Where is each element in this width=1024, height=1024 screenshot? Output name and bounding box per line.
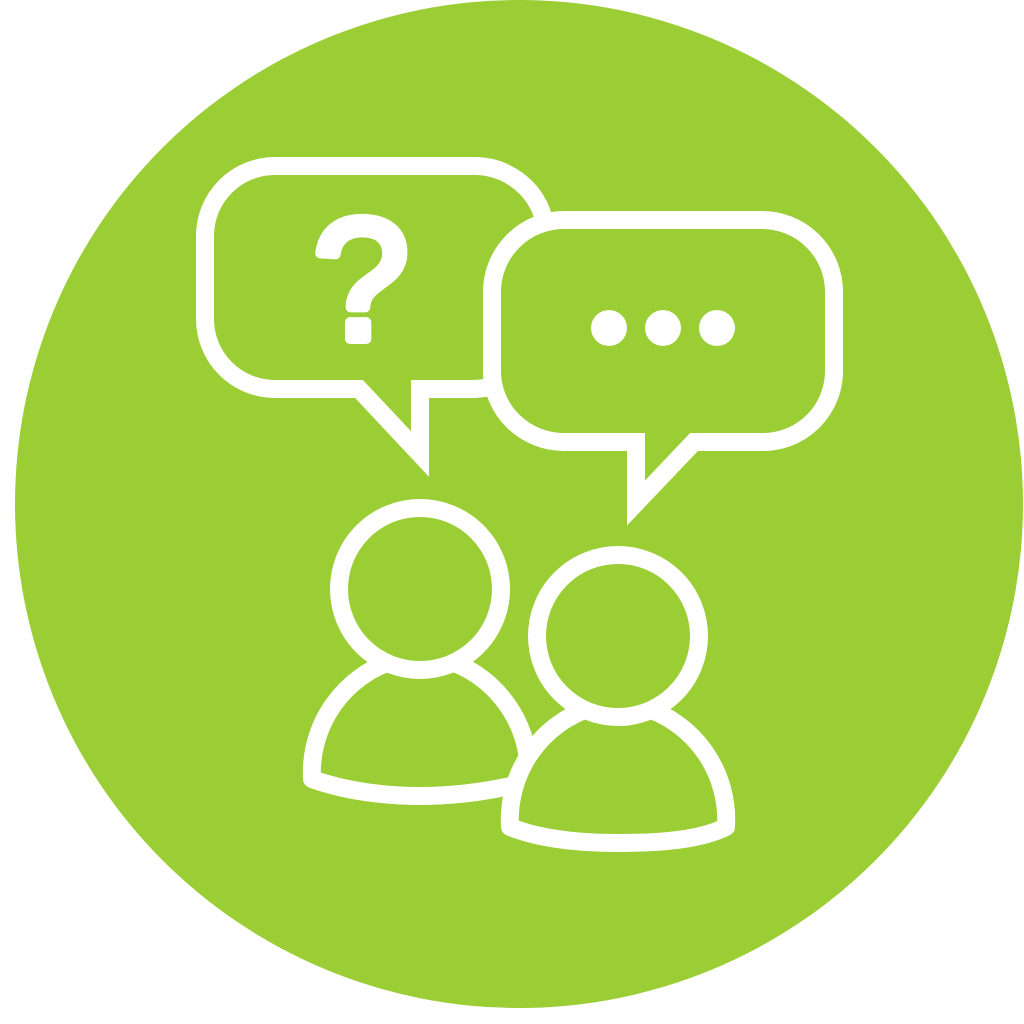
icon: right person — [510, 555, 726, 843]
icon: left person — [312, 508, 528, 796]
ellipsis dots — [591, 310, 735, 346]
body — [312, 660, 528, 796]
head — [537, 555, 699, 717]
body — [510, 707, 726, 843]
head — [339, 508, 501, 670]
question mark: ? — [313, 184, 409, 376]
icon: right speech bubble with ellipsis — [492, 220, 834, 503]
icon: left speech bubble with question mark — [205, 166, 543, 454]
